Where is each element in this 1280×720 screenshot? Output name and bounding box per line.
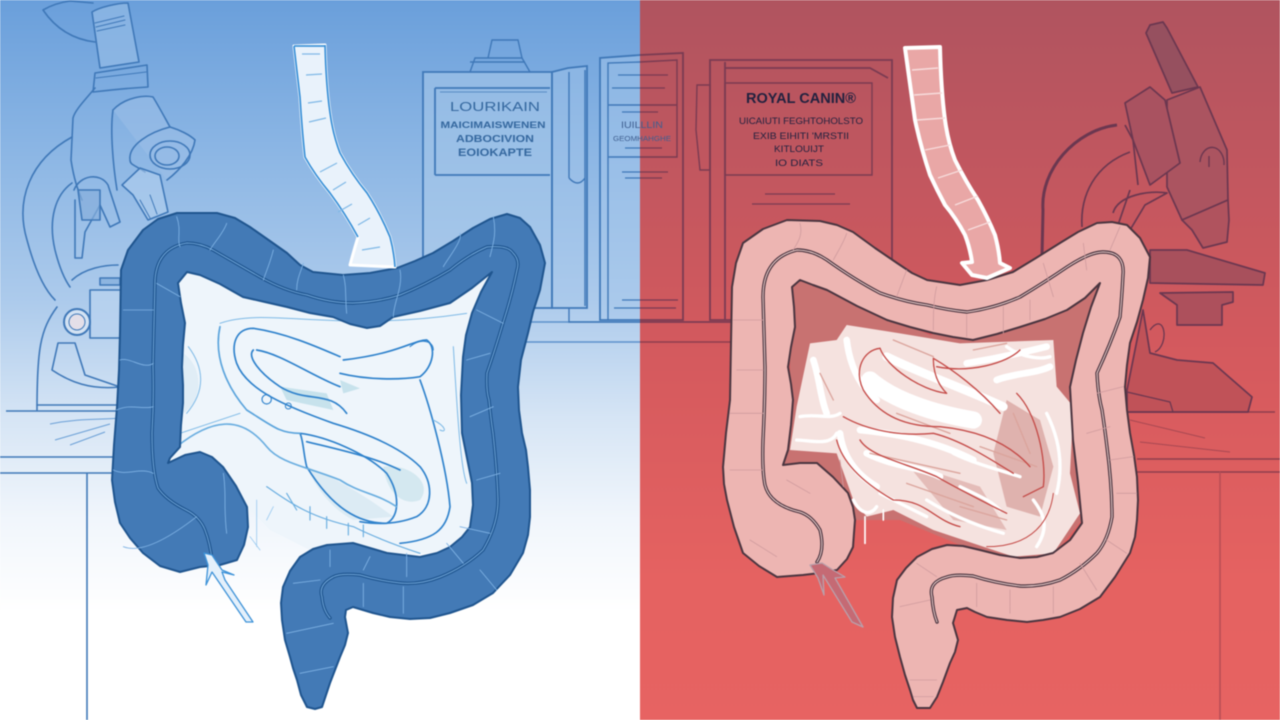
arrow: food input, blue side xyxy=(294,45,395,267)
laboratory counter, blue side xyxy=(0,322,640,720)
book cover text: LOURIKAIN xyxy=(450,100,540,114)
small intestine mass, red xyxy=(790,325,1080,557)
book: centre volume, blue half xyxy=(569,55,640,322)
colon inner lumen line, blue xyxy=(152,243,518,618)
laboratory counter, red side xyxy=(640,322,1280,720)
book cover text: UICAIUTI FEGHTOHOLSTO xyxy=(739,116,863,127)
book cover text: EXIB EIHITI 'MRSTII xyxy=(753,131,849,142)
book: Royal Canin volume xyxy=(696,60,892,320)
microscope, red side xyxy=(1042,22,1265,412)
centre volume cover text: IUILLLIN xyxy=(621,120,663,130)
panel: red side xyxy=(613,0,1280,720)
arrow: food input, red side xyxy=(905,47,1010,278)
panel: blue side xyxy=(0,0,640,720)
book: left hand volume xyxy=(423,40,587,308)
arrow: lower outlet, red side xyxy=(810,563,863,627)
blue background xyxy=(0,0,640,720)
large intestine, red xyxy=(723,220,1150,708)
large intestine, blue xyxy=(112,213,545,709)
book cover text xyxy=(739,91,863,169)
arrow: lower outlet, blue side xyxy=(204,553,253,622)
colon surface cracks, blue xyxy=(113,217,503,673)
colon surface cracks, red xyxy=(730,223,1137,697)
centre volume cover text: GEOMHAHGHE xyxy=(613,134,671,143)
book cover text: EOIOKAPTE xyxy=(458,147,532,159)
microscope, blue side xyxy=(23,1,195,410)
book cover text: ROYAL CANIN® xyxy=(746,91,856,107)
centre volume cover text xyxy=(613,120,671,143)
book cover text xyxy=(440,100,546,159)
book cover text: ADBOCIVION xyxy=(456,133,534,145)
red background xyxy=(640,0,1280,720)
book cover text: KITLOUIJT xyxy=(774,144,824,155)
colon inner lumen line, red xyxy=(763,250,1123,622)
book cover text: MAICIMAISWENEN xyxy=(440,120,546,131)
mesentery, blue xyxy=(168,272,490,558)
book: centre volume, red half xyxy=(640,53,730,322)
small intestine loops, blue xyxy=(177,313,467,553)
book cover text: IO DIATS xyxy=(775,158,823,169)
mesentery, red xyxy=(783,278,1100,560)
